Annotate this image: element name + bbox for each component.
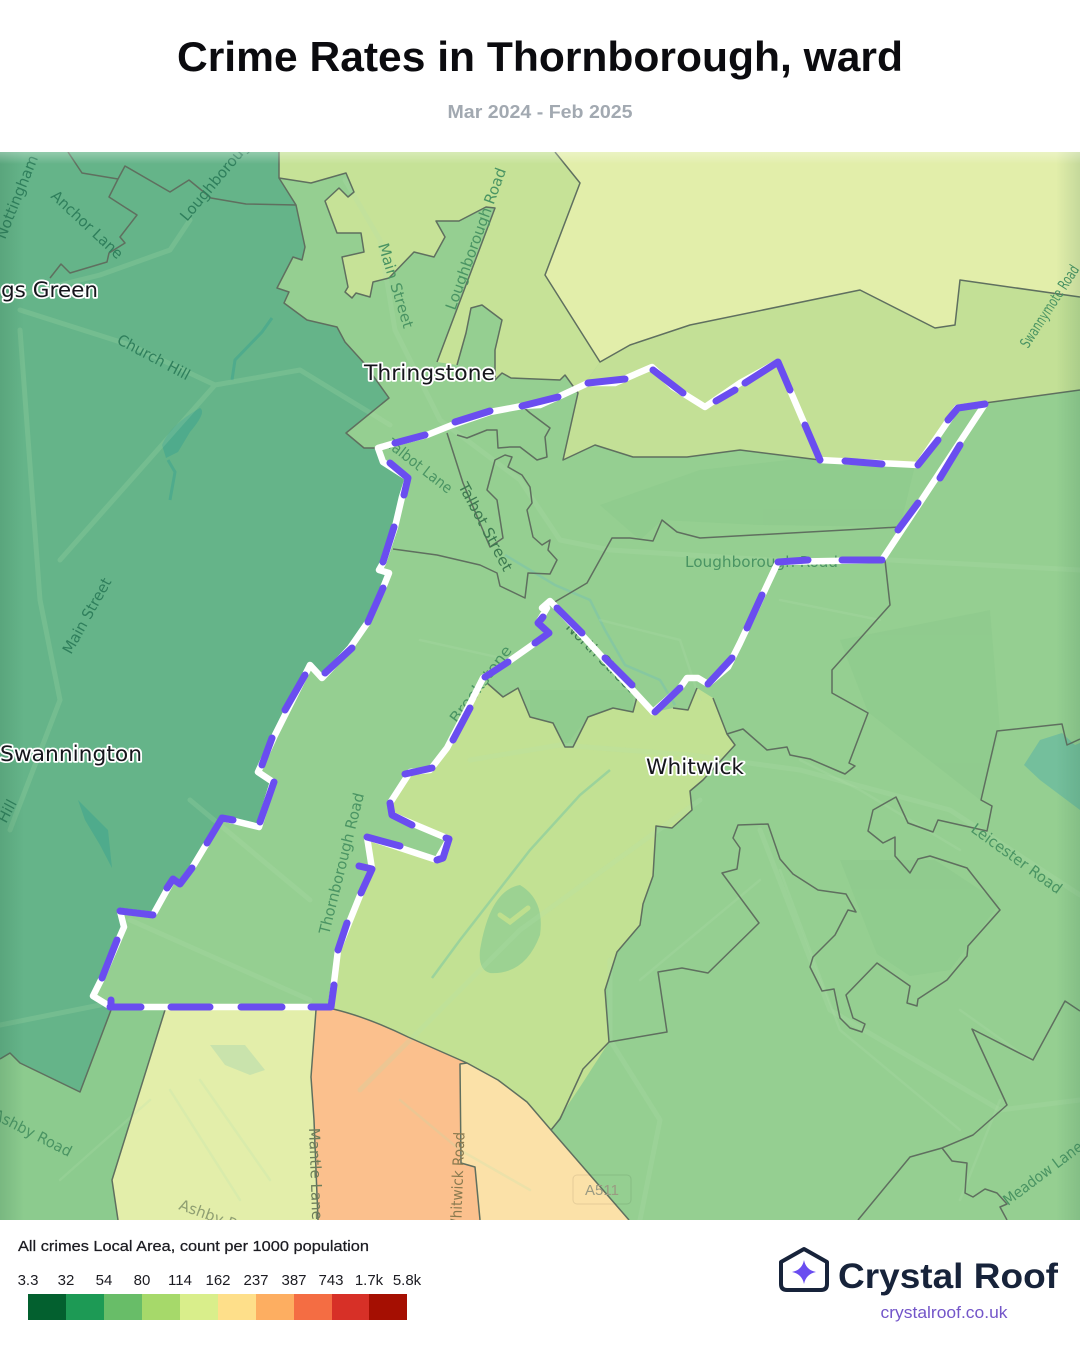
region: pale yellow south-west [112,1010,318,1220]
legend scale values: 237 [243,1272,269,1289]
legend scale values: 1.7k [355,1272,384,1289]
edge vignette [0,152,1080,1220]
subtitle: date range: Mar 2024 - Feb 2025 [448,101,632,122]
region: peach [460,1063,629,1220]
road name labels: Leicester Road [968,820,1066,898]
logo: Crystal Roof [781,1249,1058,1322]
road name labels: Whitwick Road [447,1132,468,1232]
road name labels: Anchor Lane [47,187,127,263]
legend title: All crimes Local Area, count per 1000 population [18,1238,369,1255]
road shield: A511 [573,1175,631,1204]
legend [18,1238,422,1320]
place name labels: gs Green [1,278,98,302]
road shield: A511: A511 [585,1182,619,1199]
base area: mid green [97,174,1080,1220]
place name labels [0,278,745,779]
region: north light green [279,152,600,393]
legend scale values: 32 [58,1272,74,1289]
logo wordmark: Crystal Roof [838,1257,1058,1296]
road name labels: Mantle Lane [305,1128,326,1220]
legend scale values: 387 [281,1272,307,1289]
website link: crystalroof.co.uk [880,1304,1008,1322]
road name labels: Brookstone [446,642,516,726]
place name labels: Thringstone [363,361,495,385]
road name labels: Main Street [374,241,417,330]
road name labels: Loughborough Road [685,553,838,571]
water and green features [78,318,1080,1075]
ward and area boundary lines [0,152,1080,1220]
road name labels: Main Street [59,575,115,657]
title: Crime Rates in Thornborough, ward [177,33,903,80]
road name labels: Ashby Road [177,1196,266,1243]
region: orange, highest rate [311,1008,480,1220]
region: north-east light green [563,280,1080,465]
road name labels: Loughborough [176,130,260,225]
road name labels: Talbot Lane [383,434,456,497]
region: western dark green [0,152,408,1092]
subtle darker woodland patches [530,445,1000,976]
place name labels: Whitwick [646,755,745,779]
road name labels: Thornborough Road [315,791,368,937]
region: pale yellow north [545,152,1080,362]
road name labels: Loughborough Road [442,165,510,312]
region: south-centre light green [333,683,735,1130]
road name labels: Talbot Street [454,479,516,575]
road name labels: North Street [562,618,640,696]
legend scale values: 743 [318,1272,344,1289]
road name labels: Church Hill [114,331,193,384]
roads [0,218,998,1201]
ward boundary: white line with purple dashes [93,362,985,1007]
legend scale values: 114 [168,1272,192,1289]
legend scale values: 5.8k [393,1272,422,1289]
legend scale values: 162 [205,1272,231,1289]
legend scale values: 54 [96,1272,112,1289]
legend scale values: 3.3 [18,1272,38,1289]
place name labels: Swannington [0,742,142,766]
legend scale values [18,1272,422,1289]
legend scale values: 80 [134,1272,150,1289]
icon: house with star [781,1249,827,1290]
region: south-west neighbour [0,1010,165,1220]
legend colour bar [28,1294,407,1320]
